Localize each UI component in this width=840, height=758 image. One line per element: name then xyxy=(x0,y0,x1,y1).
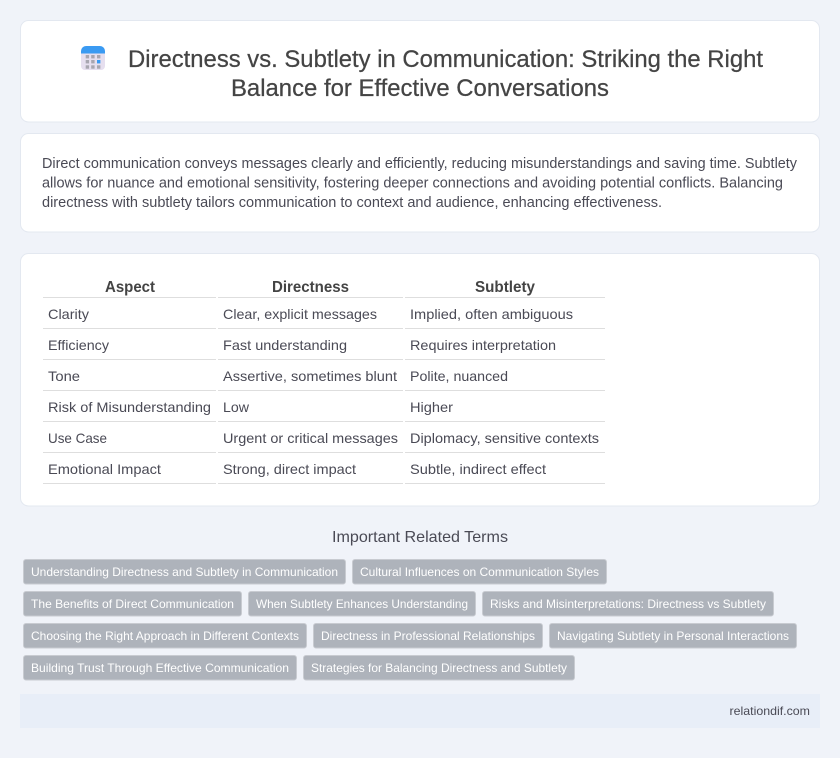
text block: summary: Direct communication conveys messages clearly and efficiently, reducing misunderstandings and saving time. Subtlety xyxy=(42,156,798,172)
table header: Directness xyxy=(272,279,349,296)
table row: tone xyxy=(48,368,508,384)
panel: title header xyxy=(20,20,820,122)
table row: emotional impact xyxy=(48,461,546,477)
table row: use case xyxy=(48,430,599,446)
table header: Subtlety xyxy=(475,279,535,296)
table row: use case: Use Case xyxy=(48,430,107,446)
text block: summary: allows for nuance and emotional sensitivity, fostering deeper connections and avoiding potential conflicts. Balancing xyxy=(42,176,783,192)
table row: efficiency: Efficiency xyxy=(48,337,109,353)
table row: emotional impact: Emotional Impact xyxy=(48,461,161,477)
panel: comparison table xyxy=(20,254,820,506)
footer xyxy=(20,694,820,728)
tag: Strategies for Balancing Directness and Subtlety xyxy=(311,661,567,675)
table row: clarity: Clear, explicit messages xyxy=(223,306,377,322)
footer source text: relationdif.com xyxy=(730,704,810,718)
tag xyxy=(24,656,296,680)
title: Directness vs. Subtlety in Communication: Striking the Right xyxy=(128,46,763,73)
tag: When Subtlety Enhances Understanding xyxy=(256,597,468,611)
heading: important related terms: Important Related Terms xyxy=(332,529,508,546)
table row: clarity: Clarity xyxy=(48,306,89,322)
table row: clarity xyxy=(48,306,573,322)
tag xyxy=(24,624,306,648)
tag: Navigating Subtlety in Personal Interactions xyxy=(557,629,789,643)
tag xyxy=(550,624,796,648)
table row: risk of misunderstanding xyxy=(48,399,453,415)
table row: emotional impact: Subtle, indirect effect xyxy=(410,461,546,477)
table row: use case: Urgent or critical messages xyxy=(223,430,398,446)
tag xyxy=(304,656,574,680)
title: Balance for Effective Conversations xyxy=(231,75,609,102)
tag xyxy=(482,592,774,616)
table row: clarity: Implied, often ambiguous xyxy=(410,306,573,322)
tag: Directness in Professional Relationships xyxy=(321,629,535,643)
tag: Cultural Influences on Communication Styles xyxy=(360,565,599,579)
table row: efficiency: Requires interpretation xyxy=(410,337,556,353)
text block: summary: directness with subtlety tailors communication to context and audience, enhancing effectiveness. xyxy=(42,195,662,211)
text block: summary xyxy=(42,156,798,211)
tag: Building Trust Through Effective Communication xyxy=(31,661,289,675)
table row: tone: Tone xyxy=(48,368,80,384)
tag xyxy=(24,560,346,584)
table row: efficiency xyxy=(48,337,556,353)
tag xyxy=(248,592,476,616)
tag xyxy=(314,624,542,648)
tag xyxy=(24,592,242,616)
table row: use case: Diplomacy, sensitive contexts xyxy=(410,430,599,446)
table row: risk of misunderstanding: Low xyxy=(223,399,250,415)
panel: summary paragraph xyxy=(20,134,820,232)
table row: risk of misunderstanding: Risk of Misunderstanding xyxy=(48,399,211,415)
tag: Choosing the Right Approach in Different Contexts xyxy=(31,629,299,643)
table header xyxy=(105,279,535,296)
table row: risk of misunderstanding: Higher xyxy=(410,399,453,415)
tag: The Benefits of Direct Communication xyxy=(31,597,234,611)
table row: tone: Polite, nuanced xyxy=(410,368,508,384)
table row: tone: Assertive, sometimes blunt xyxy=(223,368,397,384)
tag list xyxy=(24,560,796,680)
table header: Aspect xyxy=(105,279,155,296)
icon: calendar xyxy=(81,46,105,70)
table row: efficiency: Fast understanding xyxy=(223,337,347,353)
table grid lines xyxy=(43,297,605,484)
tag: Risks and Misinterpretations: Directness vs Subtlety xyxy=(490,597,766,611)
tag: Understanding Directness and Subtlety in Communication xyxy=(31,565,338,579)
table row: emotional impact: Strong, direct impact xyxy=(223,461,356,477)
title xyxy=(128,46,763,102)
tag xyxy=(352,560,606,584)
